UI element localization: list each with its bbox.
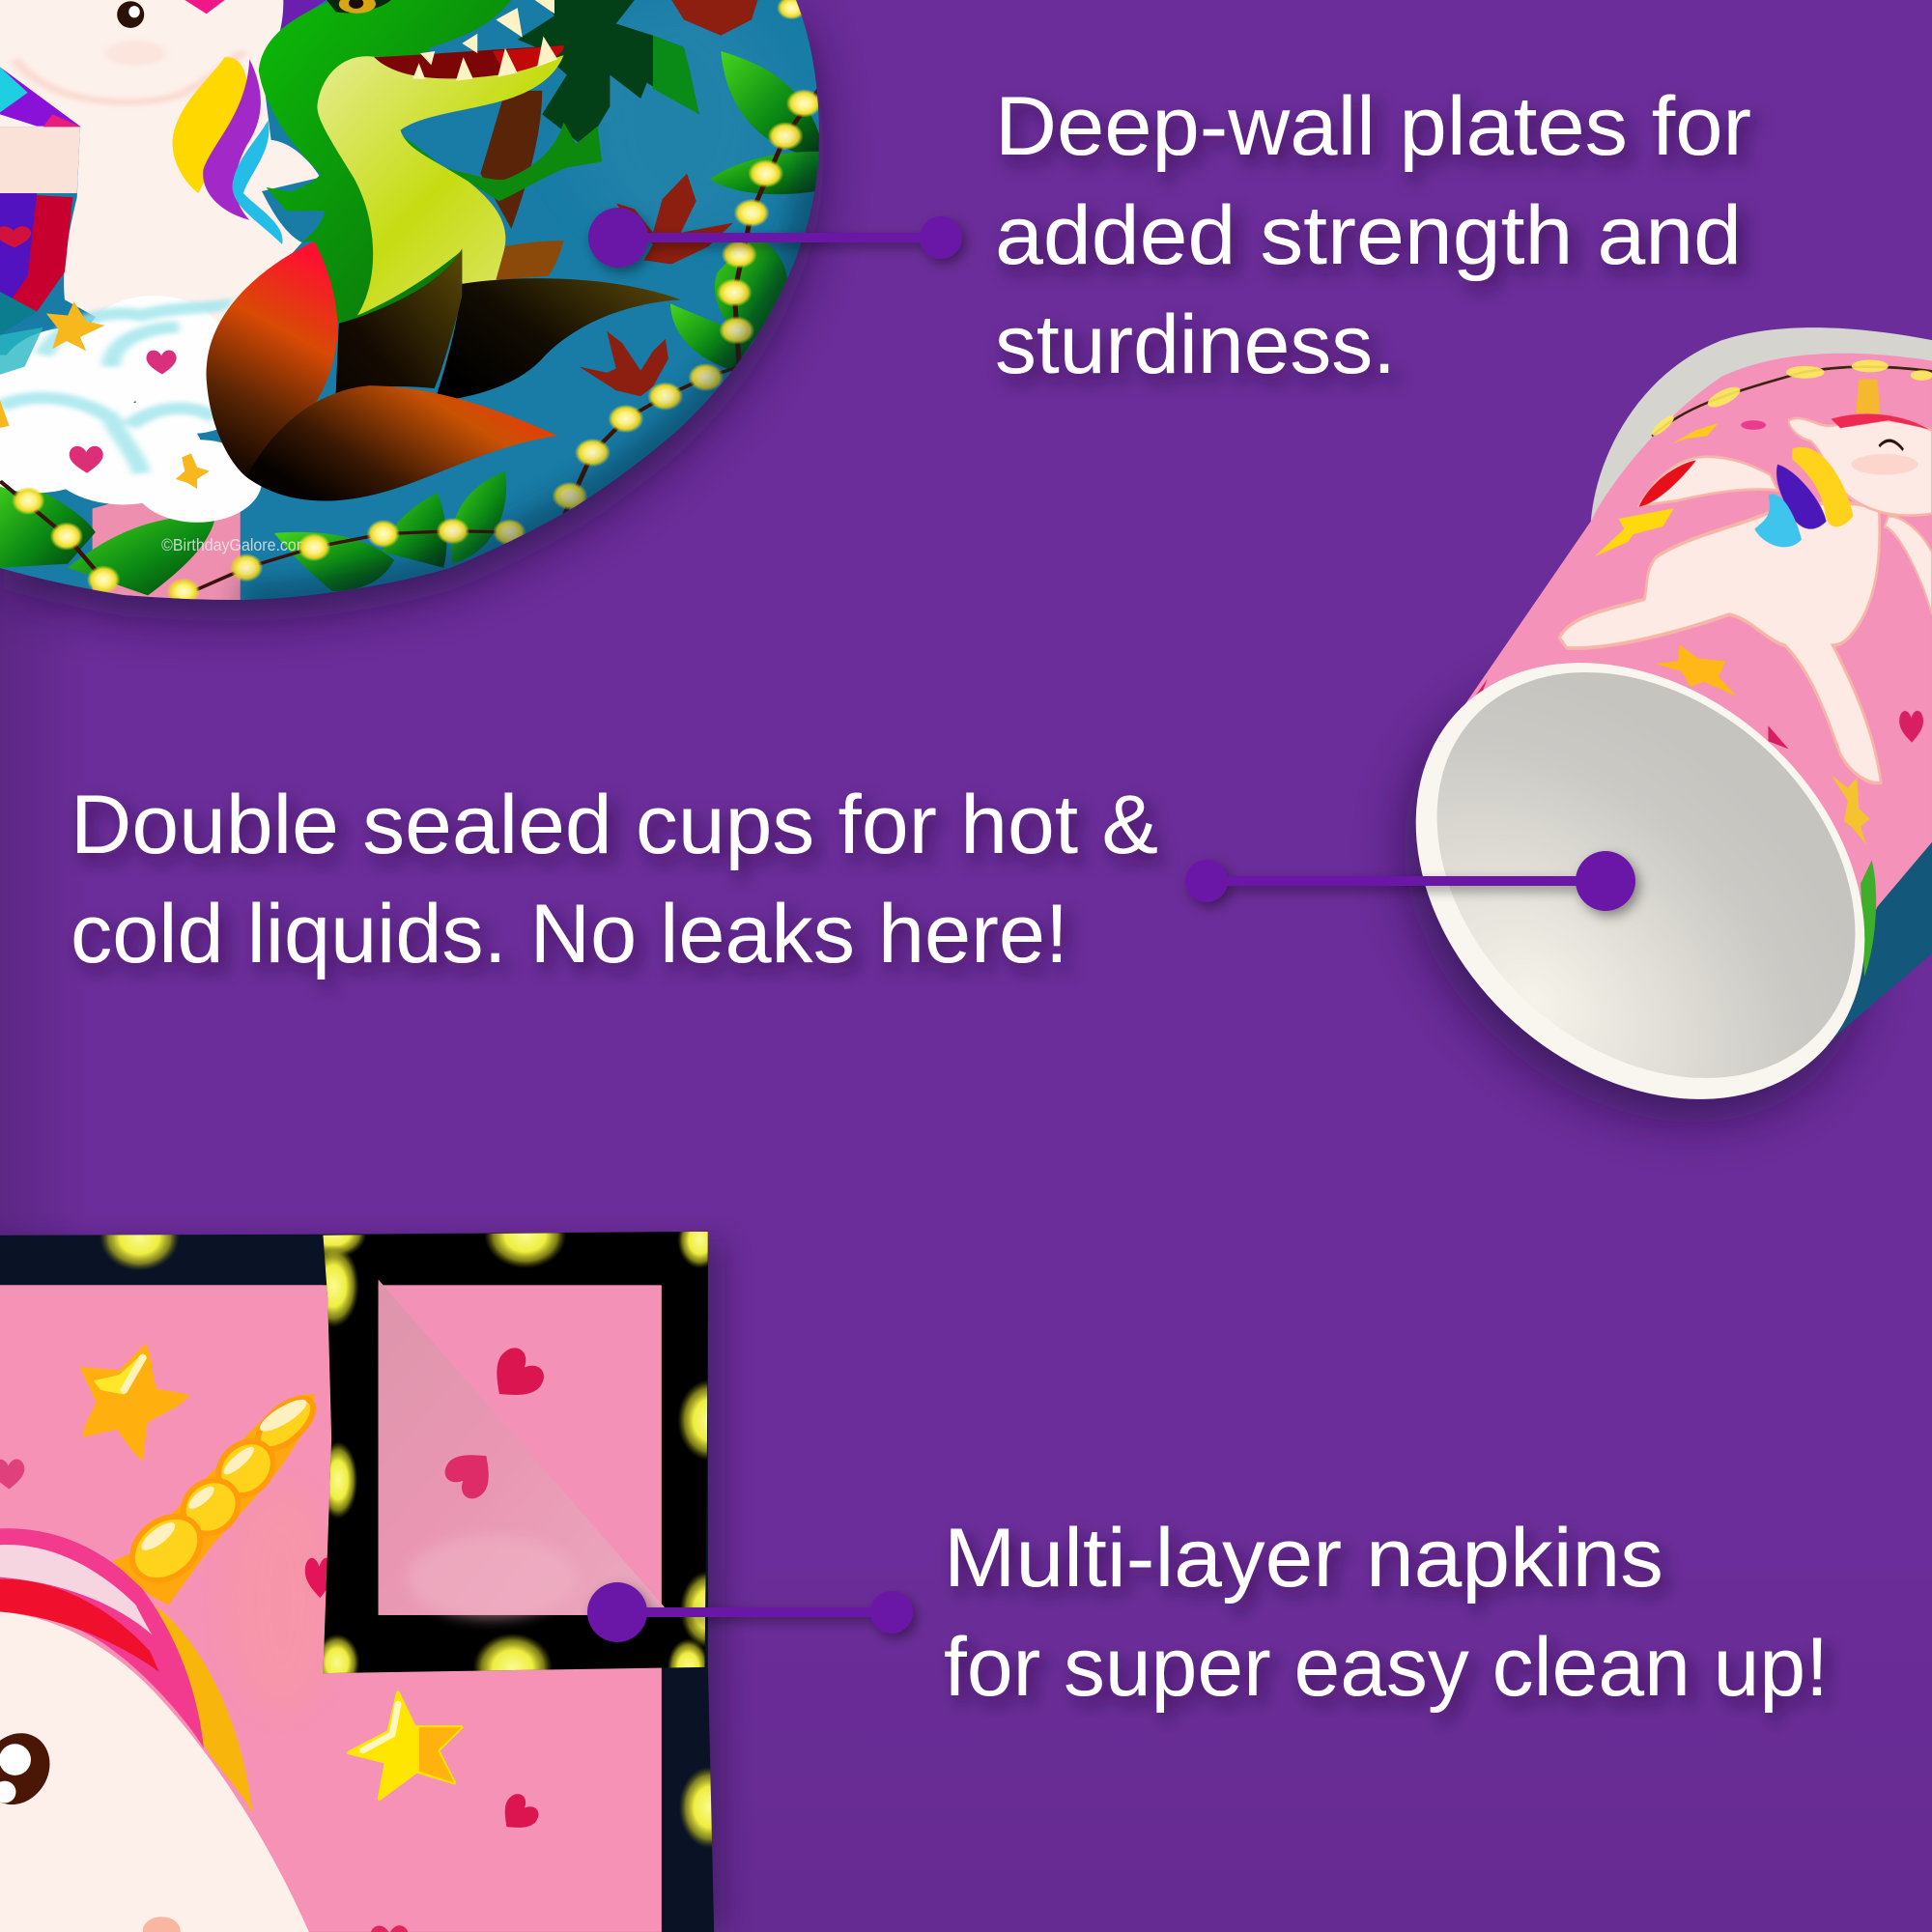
napkin hearts (0, 1460, 543, 1932)
dinosaur (259, 0, 602, 324)
cup stars and hearts (1463, 420, 1923, 844)
cloud (0, 296, 262, 523)
purple behind unicorn (280, 0, 327, 30)
pink base (93, 502, 241, 600)
cup base rim (1328, 574, 1932, 1188)
napkin star left (79, 1344, 189, 1462)
panel: paper cup (1328, 327, 1932, 1188)
napkin star right (349, 1692, 461, 1799)
cup light string (1650, 359, 1932, 439)
text block: cups (71, 779, 1158, 980)
unicorn horn (112, 1389, 322, 1605)
panel: decorated plate (0, 0, 863, 618)
cup side wall (1450, 327, 1932, 1054)
unicorn mane (173, 57, 283, 244)
dinosaur footprints (579, 0, 757, 396)
plate shadow (4, 21, 823, 621)
connector: napkin to text (587, 1582, 913, 1642)
cup leaf (1861, 861, 1876, 977)
connector: plate to text (588, 208, 962, 268)
teal section (1814, 842, 1932, 1054)
panel: folded napkin (0, 1202, 741, 1932)
cup shadow (1317, 591, 1932, 1213)
napkin border glow dots (99, 1205, 740, 1848)
connector: cup to text (1185, 851, 1635, 911)
dinosaur tail (207, 242, 681, 500)
text block: plates: Deep-wall plates for (995, 80, 1751, 173)
unicorn mane band (0, 1528, 253, 1813)
cup unicorn (1559, 379, 1932, 783)
cup base inner (1356, 589, 1932, 1161)
napkin pink face (0, 1285, 662, 1932)
leaves (0, 51, 826, 595)
text block: plates (995, 80, 1751, 391)
text block: cups: Double sealed cups for hot & (71, 779, 1158, 871)
unicorn rainbow (0, 67, 81, 335)
text block: napkins: for super easy clean up! (944, 1621, 1829, 1714)
cup wall (1450, 354, 1932, 1054)
text block: napkins: Multi-layer napkins (944, 1512, 1663, 1605)
text block: cups: cold liquids. No leaks here! (71, 888, 1068, 980)
text block: plates: added strength and (995, 189, 1742, 282)
unicorn (0, 0, 319, 326)
napkin folded corner (379, 1280, 665, 1619)
unicorn head (0, 1612, 309, 1932)
palm tree (480, 0, 699, 229)
plate stars and hearts (0, 226, 210, 489)
cup rim (1591, 327, 1932, 522)
napkin fold frame (323, 1231, 708, 1673)
napkin border (0, 1232, 714, 1932)
text block: napkins (944, 1512, 1829, 1714)
napkin shadow (0, 1241, 724, 1932)
copyright mark: ©BirthdayGalore.com (161, 535, 309, 554)
text block: plates: sturdiness. (995, 298, 1396, 391)
fairy lights (0, 0, 822, 605)
